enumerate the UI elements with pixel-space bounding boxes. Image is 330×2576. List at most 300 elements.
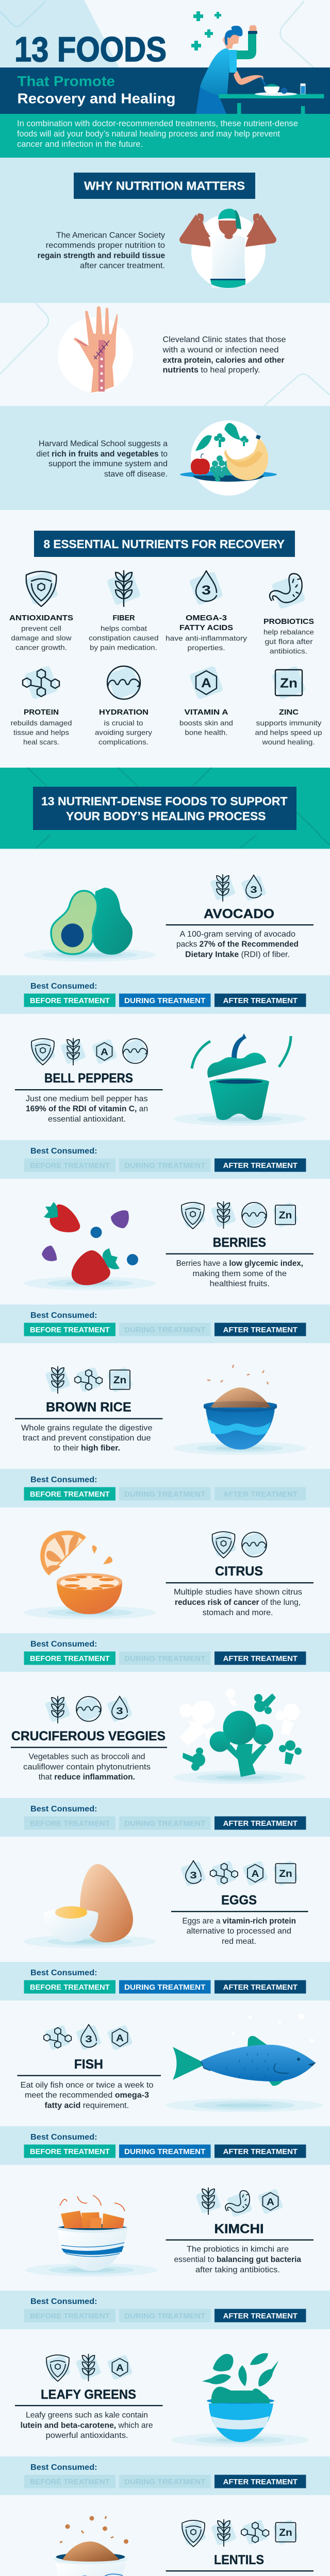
food: lentils xyxy=(0,2516,330,2576)
button: after xyxy=(214,2309,306,2323)
icons: avocado nutrients xyxy=(210,875,267,901)
icon: molecule xyxy=(23,666,59,700)
text: cleveland clinic: nutrients to heal properly. xyxy=(163,366,260,375)
icon: hydration xyxy=(241,1532,267,1557)
text: american cancer society: recommends proper nutrition to xyxy=(46,241,165,250)
button: after xyxy=(214,1980,306,1994)
text: citrus: Multiple studies have shown citrus xyxy=(174,1588,302,1597)
panel: best consumed fish xyxy=(0,2126,330,2165)
icon: zinc xyxy=(273,1202,298,1228)
icon: hydration xyxy=(241,1202,267,1228)
heading: essential nutrients xyxy=(34,531,295,557)
panel: best consumed citrus: Best Consumed: xyxy=(30,1640,97,1649)
label: omega-3: FATTY ACIDS xyxy=(179,623,233,632)
icon: vitamin a: A xyxy=(116,2362,124,2373)
icon: vitamin a xyxy=(92,1039,117,1064)
button: before xyxy=(24,2309,116,2323)
description: probiotics: help rebalance xyxy=(263,628,314,636)
panel: why nutrition matters xyxy=(0,158,330,303)
icon: omega-3 xyxy=(180,1861,206,1887)
icon: fiber xyxy=(195,2188,221,2214)
description: fiber xyxy=(89,624,159,651)
button: during: DURING TREATMENT xyxy=(124,2478,205,2486)
text: cruciferous: Vegetables such as broccoli and xyxy=(29,1753,145,1761)
illustration: citrus xyxy=(24,1531,156,1619)
text: fish: fatty acid requirement. xyxy=(44,2101,129,2110)
button: after xyxy=(214,1817,306,1830)
nutrient: vitamin a xyxy=(179,666,233,737)
button: during: DURING TREATMENT xyxy=(124,996,205,1005)
intro text: foods will aid your body’s natural healing process and may help prevent xyxy=(17,129,280,139)
icon: zinc: Zn xyxy=(279,1868,292,1879)
nutrient: hydration xyxy=(95,666,152,746)
description: omega-3 xyxy=(166,634,247,652)
text: fish: Eat oily fish once or twice a week to xyxy=(21,2081,154,2090)
illustration: avocado xyxy=(24,888,156,961)
panel: best consumed fish: Best Consumed: xyxy=(30,2133,97,2142)
icon: fiber xyxy=(45,1366,71,1393)
text: cruciferous xyxy=(23,1753,151,1782)
text: leafy greens: powerful antioxidants. xyxy=(46,2431,128,2440)
text: american cancer society: after cancer treatment. xyxy=(80,262,165,270)
description: fiber: by pain medication. xyxy=(90,643,157,651)
button: after xyxy=(214,1652,306,1665)
text: harvard: support the immune system and xyxy=(48,460,168,468)
food: kimchi xyxy=(0,2188,330,2329)
icons: lentils nutrients xyxy=(180,2519,299,2547)
heading: bell peppers: BELL PEPPERS xyxy=(44,1071,133,1086)
button: before: BEFORE TREATMENT xyxy=(30,1819,110,1828)
label: protein: PROTEIN xyxy=(24,708,59,717)
panel: best consumed leafy greens: Best Consumed: xyxy=(30,2463,97,2472)
food: bell peppers xyxy=(0,1033,330,1179)
icon: vitamin a: A xyxy=(116,2032,124,2043)
button: before: BEFORE TREATMENT xyxy=(30,1654,110,1663)
illustration: kimchi xyxy=(26,2195,158,2277)
button: after xyxy=(214,1487,306,1500)
panel: best consumed cruciferous: Best Consumed: xyxy=(30,1805,97,1814)
text: leafy greens xyxy=(21,2411,153,2440)
description: probiotics: antibiotics. xyxy=(270,647,307,655)
panel: best consumed kimchi xyxy=(0,2291,330,2329)
button: after: AFTER TREATMENT xyxy=(223,996,298,1005)
button: after: AFTER TREATMENT xyxy=(223,1490,298,1499)
icon: antioxidants xyxy=(180,2520,206,2547)
panel: best consumed berries xyxy=(0,1304,330,1343)
panel: harvard medical school xyxy=(0,406,330,510)
illustration: eggs xyxy=(24,1864,156,1948)
description: hydration: avoiding surgery xyxy=(95,728,152,737)
illustration: broccoli xyxy=(174,1689,306,1784)
button: during: DURING TREATMENT xyxy=(124,1326,205,1334)
panel: 13 foods heading xyxy=(0,768,330,849)
icon: vitamin a xyxy=(107,2025,133,2050)
text: leafy greens: Leafy greens such as kale contain xyxy=(26,2411,148,2419)
icon: vitamin a: A xyxy=(267,2196,275,2207)
label: antioxidants: ANTIOXIDANTS xyxy=(9,614,73,622)
text: american cancer society xyxy=(38,231,165,270)
text: fish xyxy=(21,2081,154,2110)
nutrient: probiotics xyxy=(263,574,314,655)
button: before: BEFORE TREATMENT xyxy=(30,2312,110,2320)
text: kimchi: after taking antibiotics. xyxy=(195,2266,280,2274)
button: after: AFTER TREATMENT xyxy=(223,2147,298,2156)
icon: protein xyxy=(44,2025,71,2050)
description: zinc xyxy=(255,719,322,746)
icon: zinc: Zn xyxy=(280,675,298,690)
button: during xyxy=(119,2144,210,2158)
button: during xyxy=(119,1487,210,1500)
text: leafy greens: lutein and beta-carotene, which are xyxy=(21,2421,153,2430)
food: berries xyxy=(0,1201,330,1343)
text: eggs: red meat. xyxy=(222,1937,256,1946)
heading: leafy greens: LEAFY GREENS xyxy=(41,2387,136,2402)
heading box xyxy=(33,787,296,830)
food: avocado xyxy=(0,875,330,1014)
button: during: DURING TREATMENT xyxy=(124,1654,205,1663)
button: before: BEFORE TREATMENT xyxy=(30,2147,110,2156)
text: avocado xyxy=(176,930,299,959)
text: citrus: reduces risk of cancer of the lung, xyxy=(175,1598,301,1607)
button: before xyxy=(24,1323,116,1336)
description: zinc: wound healing. xyxy=(261,738,315,746)
button: before: BEFORE TREATMENT xyxy=(30,1490,110,1499)
subtitle: That Promote xyxy=(18,73,115,89)
text: berries: Berries have a low glycemic index, xyxy=(176,1259,303,1268)
icon: fiber xyxy=(45,1696,71,1723)
heading: lentils: LENTILS xyxy=(214,2553,264,2567)
button: before: BEFORE TREATMENT xyxy=(30,1326,110,1334)
button: before xyxy=(24,2144,116,2158)
text: cleveland clinic xyxy=(162,335,286,375)
panel: best consumed leafy greens xyxy=(0,2456,330,2495)
food: eggs xyxy=(0,1860,330,2001)
icons: kimchi nutrients xyxy=(195,2188,283,2217)
button: during xyxy=(119,1652,210,1665)
icon: water xyxy=(107,666,141,700)
button: after: AFTER TREATMENT xyxy=(223,1654,298,1663)
label: fiber: FIBER xyxy=(112,614,135,622)
food: cruciferous veggies xyxy=(0,1689,330,1837)
description: omega-3: properties. xyxy=(188,643,225,652)
nutrient: protein xyxy=(10,666,72,746)
text: cruciferous: cauliflower contain phytonutrients xyxy=(23,1763,151,1771)
heading: citrus: CITRUS xyxy=(215,1564,263,1579)
icon: omega-3 xyxy=(107,1696,133,1722)
label: omega-3: OMEGA-3 xyxy=(186,614,227,622)
icon: omega-3 drop: 3 xyxy=(202,583,211,598)
description: vitamin a: boosts skin and xyxy=(179,719,233,727)
subtitle xyxy=(18,73,175,106)
text: berries xyxy=(176,1259,303,1288)
button: after xyxy=(214,2144,306,2158)
button: during xyxy=(119,1817,210,1830)
heading box: 13 NUTRIENT-DENSE FOODS TO SUPPORT xyxy=(41,794,288,808)
header panel xyxy=(0,0,330,158)
description: vitamin a: bone health. xyxy=(185,728,228,737)
button: during xyxy=(119,1980,210,1994)
icon: vitamin a: A xyxy=(252,1868,259,1879)
panel: best consumed avocado xyxy=(0,975,330,1014)
intro text xyxy=(17,118,298,149)
description: probiotics xyxy=(263,628,314,655)
description: vitamin a xyxy=(179,719,233,737)
button: before xyxy=(24,993,116,1007)
icon: antioxidants xyxy=(30,1038,56,1065)
text: eggs: alternative to processed and xyxy=(187,1927,291,1936)
illustration: strong woman xyxy=(179,209,276,289)
description: antioxidants xyxy=(11,624,72,651)
panel: best consumed bell peppers xyxy=(0,1140,330,1179)
button: during: DURING TREATMENT xyxy=(124,1819,205,1828)
title: 13 FOODS xyxy=(14,30,167,69)
icon: protein xyxy=(241,2519,269,2545)
text: avocado: Dietary Intake (RDI) of fiber. xyxy=(185,950,290,959)
panel: best consumed brown rice xyxy=(0,1469,330,1507)
text: eggs xyxy=(183,1917,296,1946)
text: berries: making them some of the xyxy=(193,1269,287,1278)
button: during xyxy=(119,2309,210,2323)
heading: cruciferous veggies: CRUCIFEROUS VEGGIES xyxy=(11,1729,166,1743)
button: before xyxy=(24,2475,116,2488)
description: hydration: is crucial to xyxy=(104,719,143,727)
nutrient: antioxidants xyxy=(9,571,73,651)
heading: berries: BERRIES xyxy=(213,1235,266,1250)
text: harvard: stave off disease. xyxy=(104,470,168,479)
description: protein: tissue and helps xyxy=(13,728,69,737)
text: harvard: Harvard Medical School suggests a xyxy=(39,439,168,448)
illustration: fruit plate xyxy=(180,420,277,496)
panel: best consumed berries: Best Consumed: xyxy=(30,1311,97,1320)
icon: fiber xyxy=(76,2354,101,2381)
icons: fish nutrients xyxy=(44,2025,133,2050)
panel: best consumed bell peppers: Best Consumed: xyxy=(30,1147,97,1156)
icon: zinc xyxy=(273,1860,299,1886)
illustration: brown rice bowl xyxy=(174,1365,306,1455)
icons: cruciferous nutrients xyxy=(45,1696,133,1723)
description: protein xyxy=(10,719,72,746)
heading: why nutrition matters xyxy=(74,173,255,199)
icon: fiber xyxy=(211,1201,236,1228)
icon: zinc: Zn xyxy=(113,1375,126,1386)
text: fish: meet the recommended omega-3 xyxy=(25,2091,149,2100)
button: before xyxy=(24,1980,116,1994)
text: kimchi: essential to balancing gut bacteria xyxy=(174,2256,301,2264)
button: after: AFTER TREATMENT xyxy=(223,1983,298,1992)
icon: omega-3: 3 xyxy=(190,1870,197,1880)
icon: medical plus signs xyxy=(191,11,221,50)
text: harvard xyxy=(36,439,168,479)
food: brown rice xyxy=(0,1365,330,1507)
text: bell peppers: essential antioxidant. xyxy=(48,1115,126,1124)
icon: vitamin a xyxy=(107,2354,133,2380)
button: before: BEFORE TREATMENT xyxy=(30,1161,110,1170)
panel: essential nutrients xyxy=(9,531,322,746)
description: protein: rebuilds damaged xyxy=(10,719,72,727)
icon: protein xyxy=(75,1367,102,1393)
intro text: cancer and infection in the future. xyxy=(17,139,143,149)
icon: zinc xyxy=(107,1367,133,1393)
panel: cleveland clinic xyxy=(0,303,330,406)
button: before xyxy=(24,1158,116,1172)
heading: brown rice: BROWN RICE xyxy=(46,1400,131,1415)
icons: bell peppers nutrients xyxy=(30,1038,148,1065)
text: citrus xyxy=(174,1588,302,1617)
description: antioxidants: damage and slow xyxy=(11,634,72,642)
button: after xyxy=(214,1323,306,1336)
panel: best consumed kimchi: Best Consumed: xyxy=(30,2297,97,2306)
illustration: berries xyxy=(24,1202,156,1290)
text: bell peppers xyxy=(26,1094,148,1124)
icon: protein xyxy=(210,1860,238,1886)
icons: eggs nutrients xyxy=(180,1860,299,1887)
description: antioxidants: prevent cell xyxy=(21,624,61,633)
button: during xyxy=(119,1323,210,1336)
table xyxy=(219,94,324,98)
heading: eggs: EGGS xyxy=(221,1893,257,1907)
description: omega-3: have anti-inflammatory xyxy=(166,634,247,642)
label: omega-3 xyxy=(179,614,233,632)
description: antioxidants: cancer growth. xyxy=(15,643,67,651)
header decorative shape xyxy=(0,0,119,67)
illustration: fish xyxy=(166,2013,323,2112)
button: after: AFTER TREATMENT xyxy=(223,1161,298,1170)
icon: antioxidants xyxy=(180,1202,206,1229)
illustration: lentils xyxy=(25,2516,157,2576)
heading: fish: FISH xyxy=(74,2057,103,2072)
icons: citrus nutrients xyxy=(211,1531,267,1558)
description: zinc: and helps speed up xyxy=(255,728,322,737)
button: before: BEFORE TREATMENT xyxy=(30,2478,110,2486)
text: avocado: A 100-gram serving of avocado xyxy=(179,930,295,939)
label: hydration: HYDRATION xyxy=(99,708,148,717)
button: before xyxy=(24,1652,116,1665)
heading: essential nutrients: 8 ESSENTIAL NUTRIENTS FOR RECOVERY xyxy=(43,537,285,551)
button: before: BEFORE TREATMENT xyxy=(30,1983,110,1992)
text: berries: healthiest fruits. xyxy=(209,1280,270,1288)
panel: best consumed citrus xyxy=(0,1633,330,1672)
nutrient: fiber xyxy=(89,571,159,651)
icons: brown rice nutrients xyxy=(45,1366,133,1393)
text: cleveland clinic: extra protein, calories and other xyxy=(163,356,285,365)
button: after: AFTER TREATMENT xyxy=(223,1819,298,1828)
heading: why nutrition matters: WHY NUTRITION MATTERS xyxy=(84,179,245,193)
icon: vitamin a xyxy=(242,1860,268,1886)
button: before xyxy=(24,1817,116,1830)
icon: fiber xyxy=(60,1039,86,1065)
description: probiotics: gut flora after xyxy=(265,637,313,646)
button: during: DURING TREATMENT xyxy=(124,1490,205,1499)
icon: omega-3 drop xyxy=(189,571,223,605)
food: citrus xyxy=(0,1531,330,1672)
panel: best consumed eggs xyxy=(0,1962,330,2001)
subtitle: Recovery and Healing xyxy=(18,91,175,106)
icon: antioxidants xyxy=(45,2354,71,2381)
button: during: DURING TREATMENT xyxy=(124,2312,205,2320)
icon: vitamin a: A xyxy=(201,676,211,690)
text: bell peppers: Just one medium bell pepper has xyxy=(26,1094,147,1104)
button: after xyxy=(214,993,306,1007)
text: cruciferous: that reduce inflammation. xyxy=(39,1773,135,1782)
icon: omega-3: 3 xyxy=(116,1705,123,1716)
heading: kimchi: KIMCHI xyxy=(214,2222,264,2236)
icons: leafy greens nutrients xyxy=(45,2354,133,2381)
button: during: DURING TREATMENT xyxy=(124,2147,205,2156)
icon: zinc: Zn xyxy=(279,1210,292,1221)
button: during: DURING TREATMENT xyxy=(124,1983,205,1992)
food: leafy greens xyxy=(0,2353,330,2495)
label: vitamin a: VITAMIN A xyxy=(185,708,228,717)
icon: zinc xyxy=(272,666,306,700)
icon: antioxidants xyxy=(211,1531,236,1558)
icon: omega-3 xyxy=(76,2025,102,2050)
panel: best consumed avocado: Best Consumed: xyxy=(30,982,97,991)
text: cleveland clinic: with a wound or infection need xyxy=(162,346,278,354)
description: hydration: complications. xyxy=(98,738,148,746)
description: fiber: helps combat xyxy=(101,624,147,633)
text: citrus: stomach and more. xyxy=(203,1608,273,1617)
icon: hydration xyxy=(76,1696,102,1722)
illustration: bell pepper xyxy=(174,1033,306,1126)
description: zinc: supports immunity xyxy=(256,719,322,727)
text: cleveland clinic: Cleveland Clinic states that those xyxy=(163,335,286,344)
text: american cancer society: regain strength and rebuild tissue xyxy=(38,251,165,260)
button: during: DURING TREATMENT xyxy=(124,1161,205,1170)
heading box: YOUR BODY’S HEALING PROCESS xyxy=(66,809,266,823)
icon: omega-3: 3 xyxy=(250,884,257,895)
text: kimchi: The probiotics in kimchi are xyxy=(187,2245,289,2253)
icon: fiber xyxy=(210,875,236,901)
icon: probiotics xyxy=(225,2191,252,2217)
icons: berries nutrients xyxy=(180,1201,298,1229)
illustration: stitched hand xyxy=(58,306,133,393)
button: after: AFTER TREATMENT xyxy=(223,1326,298,1334)
illustration: leafy greens xyxy=(172,2353,309,2447)
text: brown rice: to their high fiber. xyxy=(54,1444,120,1453)
icon: wheat xyxy=(107,571,141,606)
text: eggs: Eggs are a vitamin-rich protein xyxy=(183,1917,296,1926)
nutrient: zinc xyxy=(255,666,322,746)
description: protein: heal scars. xyxy=(23,738,59,746)
panel: best consumed brown rice: Best Consumed: xyxy=(30,1476,97,1484)
icon: vitamin a: A xyxy=(101,1046,109,1057)
description: hydration xyxy=(95,719,152,746)
icon: shield xyxy=(24,571,58,606)
button: before: BEFORE TREATMENT xyxy=(30,996,110,1005)
intro text: In combination with doctor-recommended treatments, these nutrient-dense xyxy=(17,118,298,128)
panel: best consumed eggs: Best Consumed: xyxy=(30,1969,97,1977)
food: fish xyxy=(0,2013,330,2165)
icon: zinc: Zn xyxy=(279,2527,292,2538)
navy band xyxy=(0,67,330,114)
text: avocado: packs 27% of the Recommended xyxy=(176,940,299,949)
text: brown rice: tract and prevent constipation due xyxy=(23,1434,151,1443)
icon: vitamin a xyxy=(258,2189,283,2214)
button: during xyxy=(119,1158,210,1172)
text: kimchi xyxy=(174,2245,301,2274)
button: after xyxy=(214,2475,306,2488)
button: before xyxy=(24,1487,116,1500)
heading: avocado: AVOCADO xyxy=(204,907,274,921)
icon: stomach xyxy=(270,574,306,609)
icon: fiber xyxy=(211,2519,237,2546)
text: bell peppers: 169% of the RDI of vitamin C, an xyxy=(26,1105,148,1113)
illustration: person eating at table xyxy=(196,25,324,114)
label: zinc: ZINC xyxy=(279,708,299,717)
button: during xyxy=(119,2475,210,2488)
description: fiber: constipation caused xyxy=(89,634,159,642)
icon: hydration xyxy=(122,1038,148,1064)
